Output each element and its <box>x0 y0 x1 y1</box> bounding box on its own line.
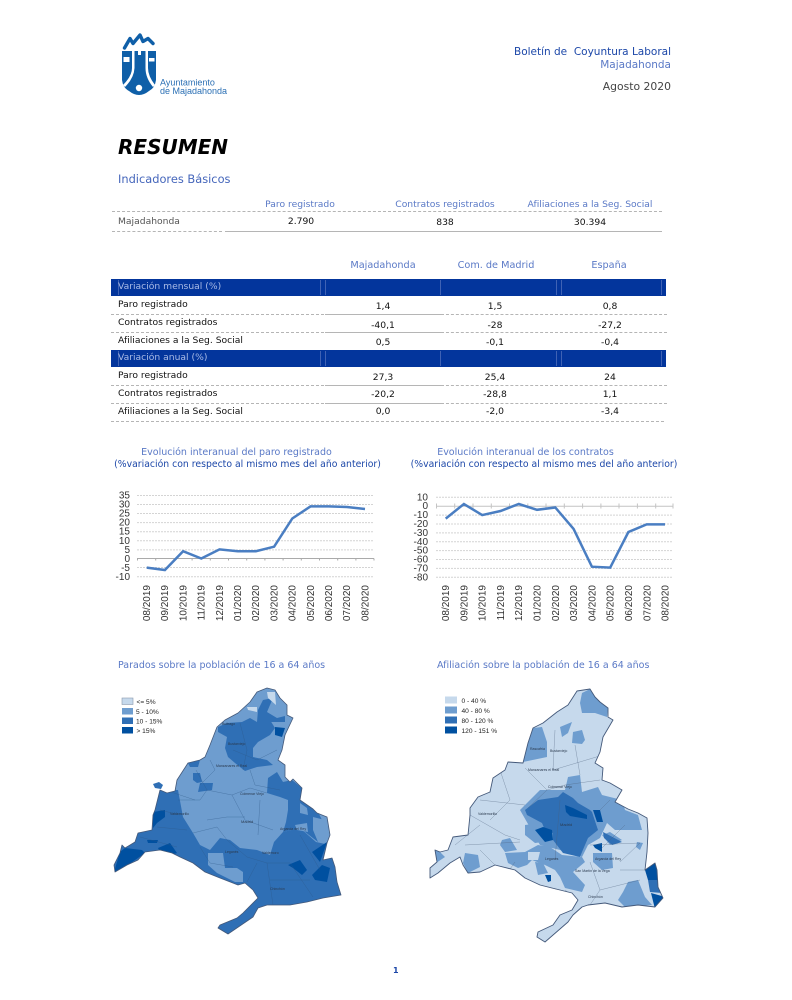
line chart: paro registrado: 03/2020 <box>269 585 280 621</box>
line chart: contratos: 06/2020 <box>624 585 635 621</box>
map: afiliación: 80 - 120 % <box>462 718 494 725</box>
line chart: paro registrado: 10 <box>119 536 130 547</box>
map heading: afiliación: Afiliación sobre la población de 16 a 64 años <box>437 660 649 671</box>
table rows: anual: 0,0 <box>376 406 390 417</box>
chart heading: contratos <box>411 447 677 470</box>
table rows: mensual: 0,5 <box>376 337 390 348</box>
line chart: contratos: 09/2019 <box>459 585 470 621</box>
map: afiliación: 0 - 40 % <box>462 698 486 705</box>
table: indicadores básicos <box>112 199 662 232</box>
chart heading: paro registrado: (%variación con respecto al mismo mes del año anterior) <box>114 459 381 470</box>
header: bulletin title <box>514 46 671 93</box>
line chart: contratos: 0 <box>422 501 428 512</box>
table rows: mensual: -40,1 <box>371 320 395 331</box>
header: bulletin title: Majadahonda <box>600 59 671 71</box>
map: parados: Valdemorillo <box>170 812 189 816</box>
line chart: contratos: 04/2020 <box>587 585 598 621</box>
table rows: anual: -2,0 <box>486 406 504 417</box>
line chart: contratos: -40 <box>414 537 428 548</box>
line chart: paro registrado: 07/2020 <box>342 585 353 621</box>
line chart: paro registrado: 02/2020 <box>251 585 262 621</box>
table rows: anual: Contratos registrados <box>118 388 217 399</box>
line chart: paro registrado: -5 <box>121 563 130 574</box>
table rows: mensual: Afiliaciones a la Seg. Social <box>118 335 243 346</box>
line chart: contratos: 10/2019 <box>478 585 489 621</box>
line chart: paro registrado: 0 <box>124 554 130 565</box>
line chart: paro registrado <box>116 490 374 621</box>
map: afiliación: Leganés <box>545 857 559 861</box>
line chart: paro registrado: 04/2020 <box>288 585 299 621</box>
table rows: anual: -3,4 <box>601 406 619 417</box>
line chart: paro registrado: 08/2019 <box>142 585 153 621</box>
title: RESUMEN <box>118 135 228 159</box>
line chart: paro registrado: 11/2019 <box>197 585 208 620</box>
table rows: mensual: Contratos registrados <box>118 317 217 328</box>
table: variación: España <box>591 260 627 271</box>
table: indicadores básicos: Paro registrado <box>265 199 335 210</box>
map: parados: Chinchón <box>270 887 285 891</box>
table: indicadores básicos: Afiliaciones a la Seg. Social <box>528 199 652 210</box>
table rows: anual: -28,8 <box>483 389 507 400</box>
line chart: paro registrado: -10 <box>116 572 130 583</box>
table rows: anual: 1,1 <box>603 389 617 400</box>
map: afiliación: Manzanares el Real <box>528 768 559 772</box>
map: afiliación: Valdemorillo <box>478 812 497 816</box>
table rows: mensual: -28 <box>487 320 503 331</box>
map: afiliación: San Martín de la Vega <box>575 869 610 873</box>
table rows: anual: 24 <box>604 372 616 383</box>
map: afiliación: Rascafría <box>530 747 545 751</box>
line chart: contratos: -20 <box>414 519 428 530</box>
line chart: paro registrado: 30 <box>119 500 130 510</box>
map: parados: Arganda del Rey <box>280 827 306 831</box>
map: afiliación <box>430 688 664 942</box>
table rows: mensual: 1,5 <box>488 301 502 312</box>
table rows: mensual: Paro registrado <box>118 299 188 310</box>
table: indicadores básicos: Contratos registrados <box>395 199 495 210</box>
table: variación: Majadahonda <box>350 260 416 271</box>
map: parados: 5 - 10% <box>136 709 159 716</box>
header: bulletin title: Boletín de Coyuntura Laboral <box>514 46 671 58</box>
map: parados: Buitrago <box>222 722 235 726</box>
line chart: contratos: 10 <box>417 492 428 503</box>
table row band: variación mensual: Variación mensual (%) <box>118 281 221 292</box>
table rows: anual: 27,3 <box>373 372 393 383</box>
table rows: mensual <box>111 299 667 348</box>
logo: Ayuntamiento de Majadahonda: de Majadahonda <box>160 86 227 96</box>
line chart: contratos: 08/2020 <box>661 585 672 621</box>
map: afiliación: Chinchón <box>588 895 603 899</box>
line chart: contratos: -10 <box>414 510 428 521</box>
map: afiliación: 40 - 80 % <box>462 708 490 715</box>
map: parados: Colmenar Viejo <box>240 792 264 796</box>
line chart: contratos: -70 <box>414 563 428 574</box>
table: indicadores básicos: 2.790 <box>288 216 314 227</box>
line chart: paro registrado: 08/2020 <box>360 585 371 621</box>
logo: Ayuntamiento de Majadahonda <box>122 33 227 96</box>
line chart: contratos: 08/2019 <box>441 585 452 621</box>
line chart: contratos: 07/2020 <box>642 585 653 621</box>
line chart: paro registrado: 12/2019 <box>215 585 226 621</box>
map: parados: Valdemoro <box>262 851 279 855</box>
map: parados: > 15% <box>136 728 156 735</box>
line chart: paro registrado: 10/2019 <box>178 585 189 621</box>
line chart: contratos: 05/2020 <box>606 585 617 621</box>
chart heading: paro registrado <box>114 447 381 470</box>
table: variación <box>350 260 627 271</box>
line chart: paro registrado: 15 <box>119 527 130 538</box>
line chart: paro registrado: 06/2020 <box>324 585 335 621</box>
table: indicadores básicos: 30.394 <box>574 217 606 228</box>
map: afiliación: Madrid <box>560 822 572 827</box>
line chart: contratos <box>414 492 674 621</box>
table rows: anual: Afiliaciones a la Seg. Social <box>118 406 243 417</box>
map: afiliación: Colmenar Viejo <box>548 785 572 789</box>
line chart: paro registrado: 5 <box>124 545 130 556</box>
table: variación: Com. de Madrid <box>458 260 534 271</box>
table rows: anual: 25,4 <box>485 372 505 383</box>
map: parados: 10 - 15% <box>136 718 163 726</box>
map: afiliación: Bustarviejo <box>550 749 567 753</box>
line chart: paro registrado: 35 <box>119 490 130 502</box>
map heading: parados: Parados sobre la población de 16 a 64 años <box>118 660 325 671</box>
map: parados: Leganés <box>225 850 239 854</box>
line chart: contratos: -30 <box>414 528 428 539</box>
heading: Indicadores Básicos: Indicadores Básicos <box>118 172 230 186</box>
chart heading: contratos: Evolución interanual de los contratos <box>437 447 614 458</box>
table rows: mensual: 0,8 <box>603 301 617 312</box>
page number: 1 <box>393 966 399 975</box>
table rows: anual: Paro registrado <box>118 370 188 381</box>
chart heading: paro registrado: Evolución interanual del paro registrado <box>141 447 332 458</box>
line chart: paro registrado: 01/2020 <box>233 585 244 621</box>
map: parados: Madrid <box>241 819 253 824</box>
line chart: paro registrado: 09/2019 <box>160 585 171 621</box>
map: parados: <= 5% <box>136 699 156 706</box>
map: parados: Bustarviejo <box>228 742 245 746</box>
line chart: contratos: 11/2019 <box>496 585 507 620</box>
line chart: paro registrado: 25 <box>119 508 130 520</box>
map: afiliación: Arganda del Rey <box>595 857 621 861</box>
table rows: anual: -20,2 <box>371 389 395 400</box>
chart heading: contratos: (%variación con respecto al mismo mes del año anterior) <box>411 459 677 470</box>
table: indicadores básicos: Majadahonda <box>118 216 180 227</box>
table rows: mensual: 1,4 <box>376 301 390 312</box>
map: parados: Manzanares el Real <box>216 764 247 768</box>
line chart: contratos: -60 <box>414 554 428 566</box>
logo: Ayuntamiento de Majadahonda: Ayuntamiento <box>160 78 215 88</box>
line chart: contratos: -80 <box>414 572 428 583</box>
table: indicadores básicos: 838 <box>436 217 454 228</box>
table rows: mensual: -27,2 <box>598 320 622 331</box>
line chart: contratos: 03/2020 <box>569 585 580 621</box>
header: bulletin title: Agosto 2020 <box>603 80 671 93</box>
line chart: paro registrado: 20 <box>119 518 130 529</box>
line chart: paro registrado: 05/2020 <box>306 585 317 621</box>
table row band: variación mensual <box>111 279 666 296</box>
line chart: contratos: 01/2020 <box>532 585 544 621</box>
table rows: mensual: -0,4 <box>601 337 619 348</box>
map: parados <box>114 688 342 934</box>
line chart: contratos: 12/2019 <box>514 585 525 621</box>
line chart: contratos: 02/2020 <box>551 585 562 621</box>
map: afiliación: 120 - 151 % <box>462 728 497 735</box>
table row band: variación anual: Variación anual (%) <box>118 352 207 363</box>
table row band: variación anual <box>111 350 666 367</box>
table rows: mensual: -0,1 <box>486 337 504 348</box>
table rows: anual <box>111 370 667 422</box>
line chart: contratos: -50 <box>414 546 428 557</box>
